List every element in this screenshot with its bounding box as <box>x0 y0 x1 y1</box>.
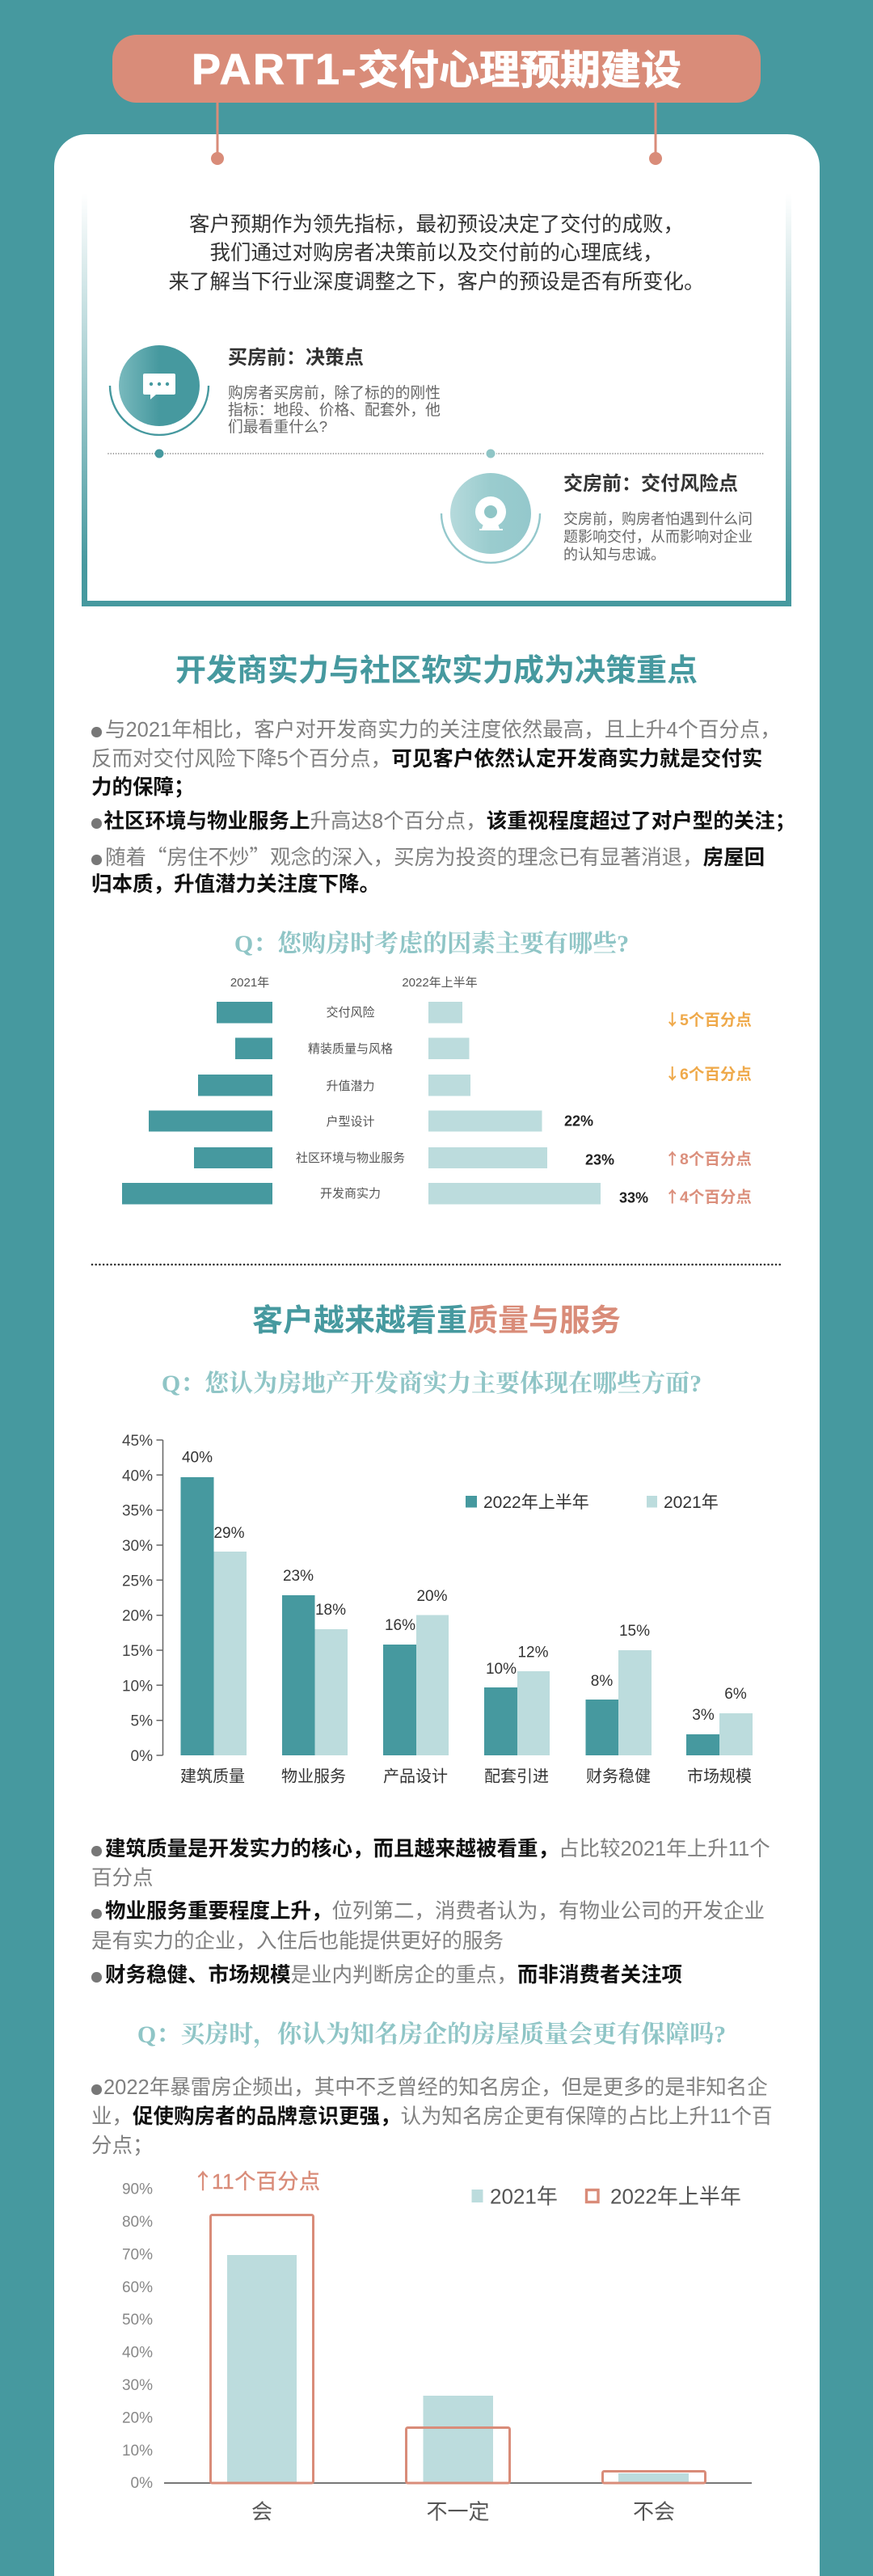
grouped bar chart: 市场规模 <box>687 1767 752 1785</box>
grouped bar chart: 10% <box>122 1678 153 1695</box>
butterfly chart: 2021年 <box>230 976 269 990</box>
grouped bar chart: 建筑质量 <box>180 1767 245 1785</box>
grouped bar chart: 16% <box>385 1617 415 1634</box>
grouped bar chart: 产品设计 <box>383 1767 448 1785</box>
grouped bar chart: 29% <box>213 1525 245 1542</box>
legend <box>466 1493 719 1512</box>
description: before delivery: 题影响交付，从而影响对企业 <box>563 529 753 545</box>
outlined bar chart: 80% <box>122 2214 153 2231</box>
intro text: 我们通过对购房者决策前以及交付前的心理底线， <box>209 241 663 264</box>
grouped bar chart: 45% <box>122 1433 153 1450</box>
legend: 2021年 <box>490 2185 558 2209</box>
grouped bar chart <box>122 1433 753 1785</box>
grouped bar chart: 0% <box>131 1748 153 1765</box>
icon: webcam <box>440 473 542 564</box>
legend: 2021年 <box>664 1493 719 1512</box>
outlined bar chart: 20% <box>122 2409 153 2426</box>
text block: strength findings: 物业服务重要程度上升，位列第二，消费者认为，有物业公司的开发企业 <box>105 1900 765 1923</box>
change note: 11 points <box>192 2165 321 2195</box>
outlined bar chart: 0% <box>131 2475 153 2492</box>
grouped bar chart: 物业服务 <box>281 1767 346 1785</box>
connector: right pin <box>649 103 662 165</box>
butterfly chart: 升值潜力 <box>326 1079 375 1093</box>
butterfly chart: 交付风险 <box>326 1005 375 1020</box>
grouped bar chart: 3% <box>692 1707 715 1724</box>
description: before delivery <box>563 511 753 563</box>
grouped bar chart: 20% <box>122 1608 153 1625</box>
text block: decision points <box>91 718 795 896</box>
description: before delivery: 的认知与忠诚。 <box>563 547 665 563</box>
change note: 11 points: ↑ <box>192 2165 214 2195</box>
outlined bar chart: 30% <box>122 2377 153 2394</box>
grouped bar chart: 5% <box>131 1713 153 1730</box>
icon: chat bubble <box>108 345 210 437</box>
outlined bar chart: 10% <box>122 2443 153 2460</box>
text block: strength findings: 财务稳健、市场规模是业内判断房企的重点，而非消费者关注项 <box>105 1963 682 1986</box>
dotted timeline <box>108 450 763 458</box>
description: before delivery: 交房前，购房者怕遇到什么问 <box>563 511 753 527</box>
outlined bar chart: 40% <box>122 2345 153 2362</box>
grouped bar chart: 18% <box>315 1602 346 1619</box>
outlined bar chart: 70% <box>122 2246 153 2263</box>
change note: appreciation: ↓ <box>664 1061 681 1084</box>
butterfly chart: 开发商实力 <box>320 1187 381 1201</box>
gradient frame <box>82 209 791 606</box>
change note: community <box>664 1146 752 1169</box>
grouped bar chart: 25% <box>122 1573 153 1590</box>
text block: brand awareness: 分点； <box>91 2135 154 2157</box>
text block: brand awareness: 2022年暴雷房企频出，其中不乏曾经的知名房企，但是更多的是非知名企 <box>103 2076 768 2099</box>
text block: decision points: 随着“房住不炒”观念的深入，买房为投资的理念已有显著消退，房屋回 <box>105 841 765 870</box>
grouped bar chart: 8% <box>591 1673 613 1690</box>
grouped bar chart: 35% <box>122 1503 153 1520</box>
grouped bar chart: 6% <box>724 1686 747 1703</box>
grouped bar chart: 配套引进 <box>484 1767 549 1785</box>
grouped bar chart: 15% <box>122 1643 153 1660</box>
change note: 11 points: 11个百分点 <box>212 2169 321 2194</box>
text block: decision points: 社区环境与物业服务上升高达8个百分点，该重视程度超过了对户型的关注； <box>103 810 795 833</box>
change note: developer <box>664 1184 752 1207</box>
grouped bar chart: 20% <box>416 1588 448 1605</box>
intro text <box>168 213 705 293</box>
change note: delivery risk <box>664 1007 752 1030</box>
grouped bar chart: 40% <box>182 1449 213 1467</box>
grouped bar chart: 30% <box>122 1538 153 1555</box>
block: before delivery <box>563 473 753 563</box>
description: before purchase: 指标：地段、价格、配套外，他 <box>228 401 441 417</box>
heading: before delivery: 交房前：交付风险点 <box>563 473 738 495</box>
text block: strength findings: 是有实力的企业，入住后也能提供更好的服务 <box>91 1929 504 1952</box>
change note: delivery risk: 5个百分点 <box>680 1011 752 1029</box>
text block: strength findings: 百分点 <box>91 1867 154 1890</box>
grouped bar chart: 财务稳健 <box>586 1767 651 1785</box>
outlined bar chart: 会 <box>251 2500 272 2524</box>
change note: developer: 4个百分点 <box>680 1189 752 1206</box>
butterfly chart: 精装质量与风格 <box>308 1042 393 1056</box>
outlined bar chart: 不会 <box>633 2500 675 2524</box>
heading: developer strength: 开发商实力与社区软实力成为决策重点 <box>175 654 698 688</box>
grouped bar chart: 40% <box>122 1467 153 1484</box>
legend <box>472 2185 741 2209</box>
title banner <box>112 35 761 103</box>
butterfly chart: 户型设计 <box>326 1115 375 1129</box>
grouped bar chart: 15% <box>619 1623 650 1640</box>
butterfly chart: 23% <box>585 1151 614 1168</box>
outlined bar chart <box>122 2181 752 2524</box>
text block: decision points: 反而对交付风险下降5个百分点，可见客户依然认定开发商实力就是交付实 <box>91 747 762 770</box>
grouped bar chart: 10% <box>486 1661 517 1678</box>
butterfly chart: 33% <box>619 1190 648 1206</box>
change note: community: 8个百分点 <box>680 1151 752 1168</box>
intro text: 客户预期作为领先指标，最初预设决定了交付的成败， <box>189 213 684 236</box>
intro text: 来了解当下行业深度调整之下，客户的预设是否有所变化。 <box>168 270 705 293</box>
butterfly chart: 2022年上半年 <box>402 976 478 990</box>
question: developer strength aspects: Q：您认为房地产开发商实力主要体现在哪些方面? <box>162 1370 702 1397</box>
description: before purchase: 购房者买房前，除了标的的刚性 <box>228 383 441 401</box>
change note: developer: ↑ <box>664 1184 681 1207</box>
question: brand quality: Q：买房时，你认为知名房企的房屋质量会更有保障吗? <box>137 2021 726 2048</box>
question: purchase factors: Q：您购房时考虑的因素主要有哪些? <box>234 931 629 957</box>
change note: community: ↑ <box>664 1146 681 1169</box>
outlined bar chart: 90% <box>122 2181 153 2198</box>
description: before purchase <box>228 383 441 435</box>
text block: brand awareness: 业，促使购房者的品牌意识更强，认为知名房企更有保障的占比上升11个百 <box>91 2105 773 2128</box>
legend: 2022年上半年 <box>610 2185 741 2209</box>
block: before purchase <box>228 347 441 435</box>
change note: delivery risk: ↓ <box>664 1007 681 1030</box>
change note: appreciation: 6个百分点 <box>680 1066 752 1083</box>
outlined bar chart: 60% <box>122 2279 153 2296</box>
y axis <box>157 1440 163 1755</box>
text block: brand awareness <box>91 2076 773 2157</box>
text block: decision points: 归本质，升值潜力关注度下降。 <box>91 873 380 896</box>
change note: appreciation <box>664 1061 752 1084</box>
text block: decision points: 力的保障； <box>91 776 195 799</box>
heading: before purchase: 买房前：决策点 <box>228 347 364 369</box>
text block: decision points: 与2021年相比，客户对开发商实力的关注度依然最高，且上升4个百分点， <box>105 718 781 741</box>
outlined bar chart: 不一定 <box>426 2500 490 2524</box>
outlined bar chart: 50% <box>122 2312 153 2329</box>
connector: left pin <box>211 103 224 165</box>
description: before purchase: 们最看重什么? <box>228 417 327 435</box>
heading: quality and service: 客户越来越看重质量与服务 <box>252 1304 621 1338</box>
text block: strength findings: 建筑质量是开发实力的核心，而且越来越被看重，占比较2021年上升11个 <box>105 1837 770 1860</box>
title banner: PART1-交付心理预期建设 <box>192 45 681 94</box>
section divider <box>91 1263 781 1266</box>
butterfly chart: 22% <box>564 1113 593 1129</box>
butterfly chart: 社区环境与物业服务 <box>296 1151 405 1165</box>
text block: strength findings <box>91 1837 770 1986</box>
legend: 2022年上半年 <box>483 1493 589 1512</box>
grouped bar chart: 23% <box>283 1568 314 1585</box>
butterfly chart <box>122 976 648 1206</box>
grouped bar chart: 12% <box>517 1645 549 1661</box>
